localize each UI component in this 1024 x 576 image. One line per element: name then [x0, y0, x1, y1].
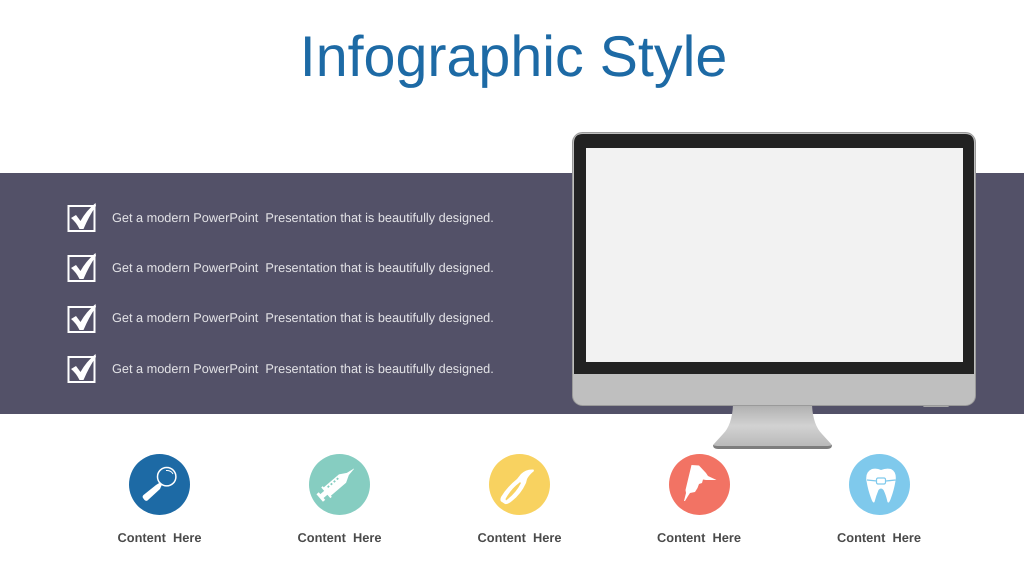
icon: checkbox 4 [68, 354, 96, 383]
text: item 2: Get a modern PowerPoint Presentation that is beautifully designed. [112, 260, 494, 275]
label: content 1: Content Here [118, 530, 201, 545]
icon: checkbox 1 [68, 203, 96, 232]
monitor [572, 132, 976, 449]
text: item 3: Get a modern PowerPoint Presentation that is beautifully designed. [112, 310, 494, 325]
title: Infographic Style [300, 25, 727, 89]
icon: checkbox 3 [68, 304, 96, 333]
label: content 5: Content Here [837, 530, 921, 545]
text: item 4: Get a modern PowerPoint Presentation that is beautifully designed. [112, 361, 494, 376]
label: content 4: Content Here [657, 530, 741, 545]
label: content 2: Content Here [298, 530, 381, 545]
icon: pliers [489, 454, 550, 515]
label: content 3: Content Here [478, 530, 561, 545]
icon: syringe [309, 454, 370, 515]
icon: dental drill [669, 454, 730, 515]
icon: magnifier [129, 454, 190, 515]
text: item 1: Get a modern PowerPoint Presentation that is beautifully designed. [112, 210, 494, 225]
icon: checkbox 2 [68, 253, 96, 282]
panel: dark band [0, 173, 1024, 414]
icon: tooth with braces [849, 454, 910, 515]
